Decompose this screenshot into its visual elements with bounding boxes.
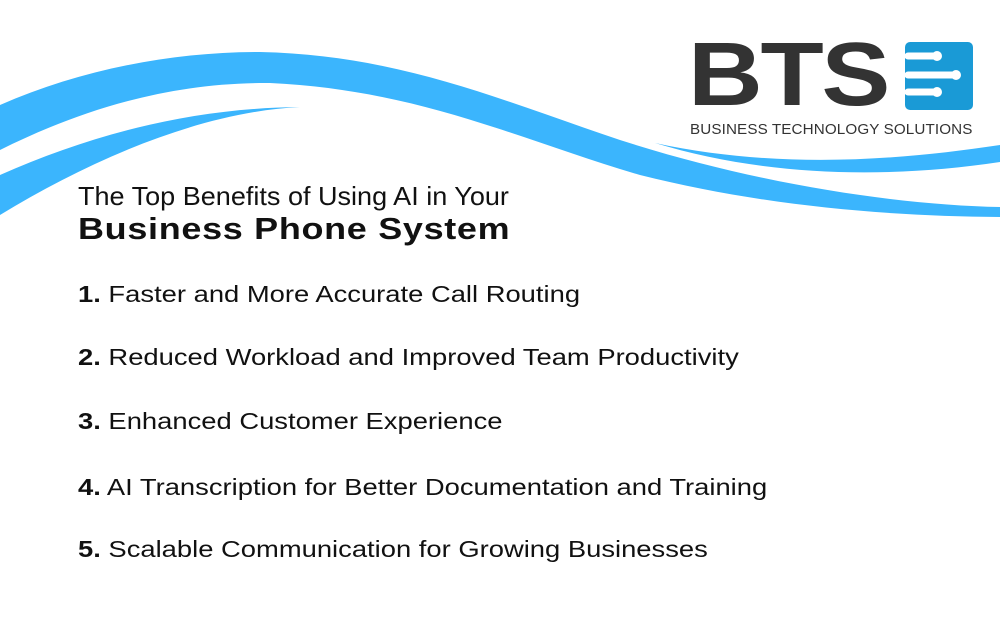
list item 5: 5. Scalable Communication for Growing Businesses — [78, 536, 708, 562]
wave: right upper band — [655, 143, 1000, 172]
list item 2: 2. Reduced Workload and Improved Team Productivity — [78, 344, 739, 370]
title — [78, 181, 510, 246]
list item 3: 3. Enhanced Customer Experience — [78, 408, 502, 434]
title: Business Phone System — [78, 211, 510, 246]
title: The Top Benefits of Using AI in Your — [78, 181, 509, 211]
logo icon — [905, 42, 973, 110]
logo subtitle: BUSINESS TECHNOLOGY SOLUTIONS — [690, 122, 973, 138]
logo text BTS: BTS — [688, 25, 888, 125]
list item 1: 1. Faster and More Accurate Call Routing — [78, 281, 580, 307]
wave: big band — [0, 52, 1000, 217]
wave: lower left thin band — [0, 107, 300, 215]
logo — [688, 25, 973, 138]
list item 4: 4. AI Transcription for Better Documentation and Training — [78, 474, 767, 500]
